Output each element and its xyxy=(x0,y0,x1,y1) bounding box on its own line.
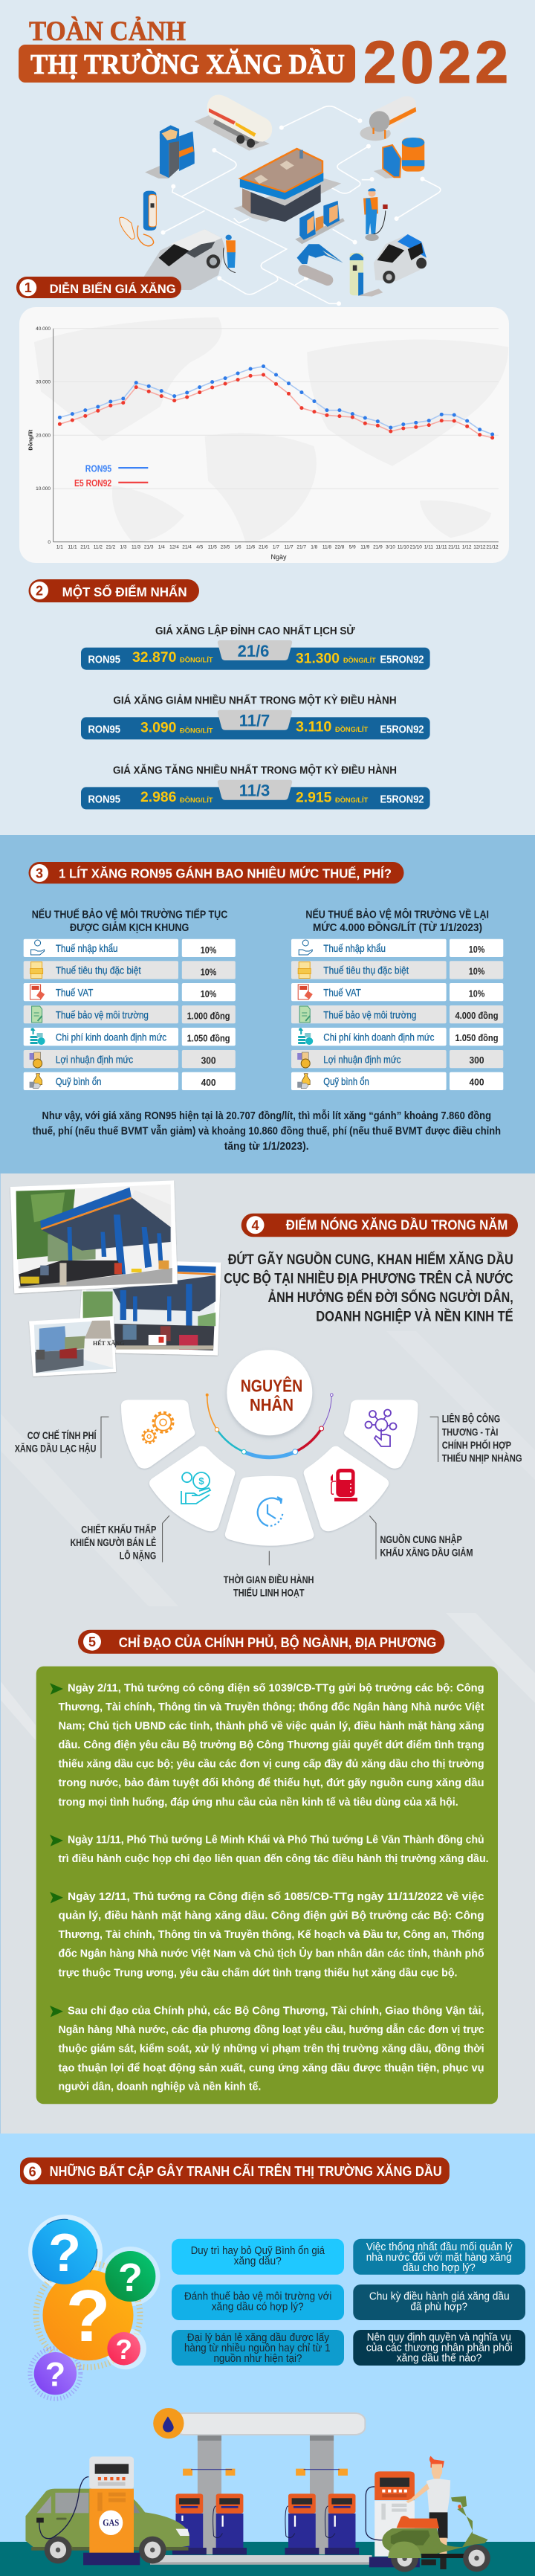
x axis labels: 21/12 xyxy=(486,544,499,550)
coloured arc xyxy=(206,1394,333,1458)
row: VAT xyxy=(291,983,503,1001)
question card 5 xyxy=(172,2330,344,2366)
directive follow-up: người dân, doanh nghiệp và nền kinh tế. xyxy=(58,2081,261,2093)
attendant refuelling car xyxy=(224,235,236,273)
x axis labels: 5/9 xyxy=(349,544,356,550)
row: special consumption tax: 10% xyxy=(201,967,217,977)
row: profit: 300 xyxy=(470,1054,484,1066)
x axis labels: 11/9 xyxy=(360,544,370,550)
right dispenser xyxy=(366,2471,420,2567)
row: environment tax: 4.000 đồng xyxy=(455,1010,499,1021)
row: business cost: 1.050 đồng xyxy=(455,1032,499,1043)
label: inflexible management time: THỜI GIAN ĐIỀU HÀNH xyxy=(224,1573,314,1585)
row: stabilization fund xyxy=(291,1072,503,1090)
section 5 header: CHỈ ĐẠO CỦA CHÍNH PHỦ, BỘ NGÀNH, ĐỊA PHƯƠNG xyxy=(119,1635,436,1650)
question card 5: Đại lý bán lẻ xăng dầu được lấy xyxy=(187,2332,330,2344)
chart legend xyxy=(74,463,148,489)
x axis labels: 23/5 xyxy=(221,544,230,550)
row: special consumption tax: Thuế tiêu thụ đặc biệt xyxy=(323,965,409,976)
text block: hot spots statement xyxy=(224,1252,513,1325)
illustration: petrol station scene xyxy=(25,2408,490,2572)
panel: tax table if environment tax stays reduced xyxy=(24,907,236,1090)
directive 12/11: Ngày 12/11, Thủ tướng ra Công điện số 1085/CĐ-TTg ngày 11/11/2022 về việc xyxy=(68,1890,484,1903)
row: special consumption tax xyxy=(291,961,503,979)
highlight: biggest single increase: RON95 xyxy=(88,793,120,805)
highlight: biggest single increase: 11/3 xyxy=(239,782,270,800)
label: inflexible management time: THIẾU LINH HOẠT xyxy=(233,1587,305,1599)
orange bubble: ? xyxy=(66,2275,110,2357)
highlight: biggest single decrease xyxy=(81,694,430,739)
highlight: record high price: RON95 xyxy=(88,654,120,666)
x axis labels: 21/1 xyxy=(80,544,90,550)
line series RON95 and E5 RON92 xyxy=(59,367,493,438)
question card 2: nhà nước đối với mặt hàng xăng xyxy=(366,2252,512,2264)
station building xyxy=(234,149,341,222)
GAS label: GAS xyxy=(103,2517,119,2528)
question card 3 xyxy=(172,2284,344,2320)
row: VAT xyxy=(24,983,236,1001)
x axis labels xyxy=(56,544,499,561)
question card 1: Duy trì hay bỏ Quỹ Bình ổn giá xyxy=(191,2245,325,2257)
canopy columns xyxy=(198,2435,334,2554)
question card 1: xăng dầu? xyxy=(234,2255,282,2267)
directive 2/11: Nam; Chủ tịch UBND các tỉnh, thành phố về việc quản lý, điều hành mặt hàng xăng xyxy=(58,1719,484,1732)
y axis labels: Đồng/lít xyxy=(27,429,34,451)
x axis labels: Ngày xyxy=(270,553,287,561)
question card 3: Đánh thuế bảo vệ môi trường với xyxy=(184,2290,331,2302)
ground xyxy=(0,2542,535,2576)
row: profit: Lợi nhuận định mức xyxy=(323,1053,401,1065)
icon: network and pointing hand xyxy=(366,1410,397,1446)
directive 2/11: dầu. Công điện yêu cầu Bộ trưởng Bộ Công Thương giải quyết dứt điểm tình trạng xyxy=(58,1739,484,1751)
question card 4: đã phù hợp? xyxy=(410,2301,467,2313)
number badge 6 xyxy=(24,2163,42,2180)
directive 12/11: quản lý, điều hành mặt hàng xăng dầu. Công điện gửi Bộ trưởng các Bộ: Công xyxy=(58,1910,484,1922)
pink bubble xyxy=(107,2332,140,2366)
row: business cost: Chi phí kinh doanh định mức xyxy=(323,1031,434,1043)
highlight: record high price: ĐỒNG/LÍT xyxy=(180,656,213,665)
row: special consumption tax xyxy=(24,961,236,979)
row: stabilization fund: Quỹ bình ổn xyxy=(56,1075,101,1087)
x axis labels: 12/4 xyxy=(169,544,179,550)
question card 6: của các thương nhân phân phối xyxy=(366,2342,513,2354)
photo: Petrolimex station crowd xyxy=(10,1180,178,1293)
directive 11/11 xyxy=(50,1833,489,1865)
x axis labels: 11/8 xyxy=(322,544,331,550)
row: import tax xyxy=(291,939,503,957)
directive 2/11: Thương, Tài chính, Thông tin và Truyền thông; thống đốc Ngân hàng Nhà nước Việt xyxy=(58,1701,484,1713)
table heading left: ĐƯỢC GIẢM KỊCH KHUNG xyxy=(70,921,189,934)
row: profit xyxy=(291,1050,503,1068)
label: inflexible management time xyxy=(224,1551,314,1599)
table heading right: NẾU THUẾ BẢO VỆ MÔI TRƯỜNG VỀ LẠI xyxy=(305,907,489,921)
section 2 header: MỘT SỐ ĐIỂM NHẤN xyxy=(62,584,187,599)
central circle: nguyên nhân xyxy=(227,1350,312,1435)
highlight: record high price xyxy=(81,624,430,670)
directive 2/11: thiếu xăng dầu cục bộ; yêu cầu các đơn vị cung cấp đầy đủ xăng dầu cho thị trường xyxy=(58,1758,484,1771)
label: outdated pricing mechanism: CƠ CHẾ TÍNH PHÍ xyxy=(27,1429,97,1441)
fuel dispenser left xyxy=(145,125,195,178)
highlight: biggest single decrease: RON95 xyxy=(88,724,120,735)
directive follow-up: Sau chỉ đạo của Chính phủ, các Bộ Công Thương, Tài chính, Giao thông Vận tải, xyxy=(68,2004,484,2017)
row: import tax xyxy=(24,939,236,957)
row: stabilization fund: 400 xyxy=(470,1077,484,1087)
number badge 2: 2 xyxy=(36,583,43,598)
x axis labels: 1/3 xyxy=(120,544,127,550)
x axis labels: 3/10 xyxy=(386,544,395,550)
label: ministries lack coordination xyxy=(430,1412,522,1464)
label: low discount: LỖ NẶNG xyxy=(120,1549,156,1562)
highlight: record high price: ĐỒNG/LÍT xyxy=(343,656,376,665)
heading: Toàn cảnh: TOÀN CẢNH xyxy=(29,16,186,47)
x axis labels: 11/2 xyxy=(94,544,103,550)
row: VAT: Thuế VAT xyxy=(323,986,361,998)
directive follow-up: thuộc giám sát, kiểm soát, xử lý những vi phạm trên thị trường xăng dầu, đồng thời xyxy=(58,2043,484,2055)
central circle: nguyên nhân: NGUYÊN xyxy=(241,1376,302,1396)
attendant with nozzle xyxy=(363,188,388,241)
highlight: biggest single decrease: ĐỒNG/LÍT xyxy=(335,725,368,734)
directive 2/11 xyxy=(50,1681,484,1809)
diagram: causes xyxy=(15,1350,522,1599)
row: import tax: 10% xyxy=(201,944,217,956)
x axis labels: 12/12 xyxy=(473,544,486,550)
chart legend: RON95 xyxy=(85,463,111,474)
table heading left xyxy=(32,907,227,934)
x axis labels: 1/7 xyxy=(273,544,279,550)
directive follow-up xyxy=(50,2004,484,2093)
x axis labels: 22/8 xyxy=(335,544,345,550)
question card 6 xyxy=(353,2330,525,2366)
label: ministries lack coordination: LIÊN BỘ CÔNG xyxy=(442,1412,500,1425)
label: import supply decline xyxy=(369,1516,473,1559)
row: import tax: Thuế nhập khẩu xyxy=(323,942,386,954)
directive follow-up: Ngân hàng Nhà nước, các địa phương đồng loạt yêu cầu, hướng dẫn các đơn vị trực xyxy=(58,2023,484,2036)
highlight: record high price: GIÁ XĂNG LẬP ĐỈNH CAO NHẤT LỊCH SỬ xyxy=(155,624,355,637)
y axis labels: 10.000 xyxy=(36,486,51,492)
panel: tax table if environment tax returns to 4000 xyxy=(291,907,503,1090)
highlight: biggest single increase: GIÁ XĂNG TĂNG NHIỀU NHẤT TRONG MỘT KỲ ĐIỀU HÀNH xyxy=(113,764,397,777)
purple bubble xyxy=(34,2352,77,2395)
row: import tax: Thuế nhập khẩu xyxy=(56,942,117,954)
label: ministries lack coordination: CHÍNH PHỐI HỢP xyxy=(442,1438,511,1451)
x axis labels: 11/11 xyxy=(435,544,447,550)
x axis labels: 21/3 xyxy=(144,544,154,550)
label: outdated pricing mechanism: XĂNG DẦU LẠC HẬU xyxy=(15,1442,97,1455)
section 6 header xyxy=(20,2157,450,2184)
highlight: biggest single increase: 2.986 xyxy=(140,790,176,805)
question card 6: Nên quy định quyền và nghĩa vụ xyxy=(367,2332,511,2344)
row: VAT: Thuế VAT xyxy=(56,986,94,998)
highlight: biggest single decrease: GIÁ XĂNG GIẢM NHIỀU NHẤT TRONG MỘT KỲ ĐIỀU HÀNH xyxy=(113,694,397,707)
directive 12/11: đốc Ngân hàng Nhà nước Việt Nam và Chủ tịch Ủy ban nhân dân các tỉnh, thành phố xyxy=(58,1947,484,1960)
icon: dollar sign: $ xyxy=(198,1475,204,1487)
number badge 4: 4 xyxy=(251,1218,259,1233)
row: stabilization fund xyxy=(24,1072,236,1090)
section 1 header: DIỄN BIẾN GIÁ XĂNG xyxy=(50,282,176,296)
number badge 5 xyxy=(83,1633,101,1651)
text block: tax summary xyxy=(33,1110,501,1153)
y axis labels: 30.000 xyxy=(36,379,51,385)
icon: gears xyxy=(143,1412,173,1443)
x axis labels: 11/5 xyxy=(208,544,217,550)
highlight: biggest single increase: ĐỒNG/LÍT xyxy=(180,796,213,805)
directive 12/11: trực thuộc Trung ương, yêu cầu chấm dứt tình trạng thiếu hụt xăng dầu cục bộ. xyxy=(58,1966,457,1979)
barrel and jerry can xyxy=(374,138,424,178)
y axis labels: 0 xyxy=(48,540,51,545)
question card 2 xyxy=(353,2239,525,2275)
section 6 header: NHỮNG BẤT CẬP GÂY TRANH CÃI TRÊN THỊ TRƯỜNG XĂNG DẦU xyxy=(50,2163,442,2179)
highlight: biggest single decrease: E5RON92 xyxy=(380,724,424,735)
text block: tax summary: tăng từ 1/1/2023). xyxy=(224,1140,309,1153)
EV charger right xyxy=(350,253,383,297)
table heading left: NẾU THUẾ BẢO VỆ MÔI TRƯỜNG TIẾP TỤC xyxy=(32,907,227,921)
row: business cost xyxy=(291,1028,503,1046)
icon: coins and hand xyxy=(181,1472,210,1504)
icon group: question bubbles xyxy=(28,2215,160,2399)
x axis labels: 21/7 xyxy=(296,544,306,550)
green bubble: ? xyxy=(118,2255,143,2300)
chart legend: E5 RON92 xyxy=(74,477,111,489)
highlight: biggest single increase: 2.915 xyxy=(296,790,332,806)
directive 12/11 xyxy=(50,1890,484,1979)
row: environment tax: Thuế bảo vệ môi trường xyxy=(323,1008,416,1020)
row: special consumption tax: Thuế tiêu thụ đặc biệt xyxy=(56,965,141,976)
label: low discount: KHIẾN NGƯỜI BÁN LẺ xyxy=(71,1536,156,1548)
question card 1 xyxy=(172,2239,344,2275)
orange bubble xyxy=(43,2270,134,2360)
y axis labels: 20.000 xyxy=(36,433,51,439)
table heading right: MỨC 4.000 ĐỒNG/LÍT (TỪ 1/1/2023) xyxy=(313,921,482,934)
directive 2/11: trong nước, bảo đảm tuyệt đối không để thiếu hụt, đứt gãy nguồn cung xăng dầu xyxy=(58,1777,484,1789)
green bubble xyxy=(105,2251,155,2302)
directive follow-up: tạo thuận lợi để hoạt động sản xuất, cung ứng xăng dầu được thuận tiện, phục vụ xyxy=(58,2061,484,2074)
number badge 1: 1 xyxy=(25,280,32,295)
directive 11/11: Ngày 11/11, Phó Thủ tướng Lê Minh Khái và Phó Thủ tướng Lê Văn Thành đồng chủ xyxy=(68,1833,484,1846)
question card 3: xăng dầu có hợp lý? xyxy=(212,2301,304,2313)
green car xyxy=(25,2477,189,2563)
label: import supply decline: KHẨU XĂNG DẦU GIẢM xyxy=(380,1546,473,1559)
row: profit: 300 xyxy=(201,1054,216,1066)
y axis labels: 40.000 xyxy=(36,326,51,332)
label: import supply decline: NGUỒN CUNG NHẬP xyxy=(380,1533,462,1545)
big GAS pump xyxy=(83,2456,140,2565)
illustration: isometric petrol station xyxy=(120,94,441,303)
x axis labels: 21/9 xyxy=(373,544,383,550)
icon: clock xyxy=(258,1497,282,1526)
section 2 header xyxy=(28,579,199,602)
man with scooter xyxy=(382,2456,490,2572)
photo: out of petrol sign xyxy=(29,1316,124,1376)
x axis labels: 1/4 xyxy=(158,544,165,550)
highlight: biggest single decrease: 3.110 xyxy=(296,720,331,735)
x axis labels: 1/1 xyxy=(56,544,63,550)
number badge 1 xyxy=(19,279,36,296)
section 4 header: ĐIỂM NÓNG XĂNG DẦU TRONG NĂM xyxy=(286,1217,508,1232)
row: VAT: 10% xyxy=(469,988,485,999)
row: profit xyxy=(24,1050,236,1068)
highlight: biggest single increase: ĐỒNG/LÍT xyxy=(335,796,368,805)
label: low discount: CHIẾT KHẤU THẤP xyxy=(81,1523,156,1535)
row: environment tax xyxy=(291,1005,503,1023)
x axis labels: 1/8 xyxy=(311,544,318,550)
number badge 6: 6 xyxy=(29,2164,36,2179)
row: business cost: 1.050 đồng xyxy=(187,1032,230,1044)
photo: out of petrol sign: HẾT XĂNG xyxy=(93,1339,124,1347)
x axis labels: 21/10 xyxy=(410,544,422,550)
pink bubble: ? xyxy=(115,2334,132,2365)
highlight: biggest single decrease: ĐỒNG/LÍT xyxy=(180,727,213,735)
question card 6: xăng dầu thế nào? xyxy=(397,2353,482,2365)
icon: red fuel pump xyxy=(331,1469,357,1501)
central circle: nguyên nhân: NHÂN xyxy=(250,1394,294,1414)
panel: petrol price line chart xyxy=(19,307,509,563)
x axis labels: 1/12 xyxy=(462,544,472,550)
number badge 4 xyxy=(247,1216,265,1234)
section 5 header xyxy=(78,1630,444,1654)
tanker truck xyxy=(195,94,272,151)
heading: year 2022: 2022 xyxy=(363,29,508,95)
number badge 3: 3 xyxy=(36,866,43,880)
x axis labels: 11/10 xyxy=(398,544,409,550)
forecourt slab xyxy=(150,2555,372,2565)
question card 5: nguồn như hiện tại? xyxy=(214,2353,302,2365)
directive 2/11: trong mọi tình huống, đáp ứng nhu cầu của nền kinh tế và tiêu dùng của xã hội. xyxy=(58,1796,458,1809)
row: stabilization fund: 400 xyxy=(201,1077,216,1088)
section 1 header xyxy=(16,277,181,298)
number badge 5: 5 xyxy=(88,1635,96,1649)
number badge 2 xyxy=(30,582,48,599)
row: special consumption tax: 10% xyxy=(469,966,485,977)
directive 2/11: Ngày 2/11, Thủ tướng có công điện số 1039/CĐ-TTg gửi bộ trưởng các bộ: Công xyxy=(68,1681,484,1694)
blue bubble xyxy=(32,2219,97,2284)
header title xyxy=(19,16,508,95)
highlight: record high price: 32.870 xyxy=(132,650,176,666)
section 3 header xyxy=(28,862,404,883)
section 4 header xyxy=(241,1214,518,1237)
highlight: record high price: E5RON92 xyxy=(380,654,424,666)
white petals xyxy=(121,1400,418,1546)
pump island xyxy=(295,201,345,244)
label: ministries lack coordination: THƯƠNG - TÀI xyxy=(442,1426,498,1437)
question card 2: dầu cho hợp lý? xyxy=(403,2262,476,2274)
small electric car xyxy=(374,234,427,283)
row: stabilization fund: Quỹ bình ổn xyxy=(323,1075,369,1087)
row: environment tax: Thuế bảo vệ môi trường xyxy=(56,1008,149,1020)
y axis labels xyxy=(27,326,51,545)
EV charger left xyxy=(120,191,156,246)
storage tank xyxy=(360,96,416,141)
label: outdated pricing mechanism xyxy=(15,1417,109,1458)
x axis labels: 11/3 xyxy=(132,544,141,550)
title banner: THỊ TRƯỜNG XĂNG DẦU xyxy=(30,48,345,80)
row: environment tax: 1.000 đồng xyxy=(187,1010,230,1022)
panel: government directions xyxy=(36,1667,498,2104)
photo: queue at station, overpass xyxy=(78,1259,221,1356)
purple bubble: ? xyxy=(45,2356,65,2393)
directive 11/11: trì điều hành cuộc họp chỉ đạo liên quan đến công tác điều hành thị trường xăng dầu. xyxy=(58,1852,489,1865)
highlight: record high price: 31.300 xyxy=(296,651,340,667)
silver car refuelling xyxy=(143,229,225,290)
row: environment tax xyxy=(24,1005,236,1023)
canopy sign xyxy=(153,2408,365,2438)
chart grid and axes xyxy=(54,329,499,542)
row: VAT: 10% xyxy=(201,988,217,999)
table heading right xyxy=(305,907,489,934)
blue bubble: ? xyxy=(48,2224,81,2283)
x axis labels: 21/11 xyxy=(448,544,460,550)
section 3 header: 1 LÍT XĂNG RON95 GÁNH BAO NHIÊU MỨC THUẾ, PHÍ? xyxy=(59,866,392,881)
row: import tax: 10% xyxy=(469,944,485,955)
row: profit: Lợi nhuận định mức xyxy=(56,1053,133,1065)
question card 2: Việc thống nhất đầu mối quản lý xyxy=(366,2241,513,2253)
hanging lamps xyxy=(183,2469,348,2476)
highlight: biggest single decrease: 3.090 xyxy=(140,721,176,736)
small dispensers xyxy=(172,2493,359,2554)
question card 4 xyxy=(353,2284,525,2320)
x axis labels: 21/2 xyxy=(106,544,116,550)
x axis labels: 11/6 xyxy=(246,544,256,550)
x axis labels: 1/6 xyxy=(235,544,241,550)
question card 5: hàng từ nhiều nguồn hay chỉ từ 1 xyxy=(184,2342,330,2354)
question card 4: Chu kỳ điều hành giá xăng dầu xyxy=(369,2290,510,2302)
row: business cost: Chi phí kinh doanh định mức xyxy=(56,1031,166,1043)
x axis labels: 21/6 xyxy=(259,544,268,550)
highlight: biggest single increase xyxy=(81,764,430,809)
label: low discount xyxy=(71,1516,169,1562)
directive 12/11: Thương, Tài chính, Thông tin và Truyền thông, Kế hoạch và Đầu tư, Công an, Thống xyxy=(58,1928,484,1941)
x axis labels: 11/7 xyxy=(285,544,294,550)
row: business cost xyxy=(24,1028,236,1046)
x axis labels: 4/5 xyxy=(196,544,204,550)
x axis labels: 1/11 xyxy=(424,544,433,550)
x axis labels: 11/1 xyxy=(68,544,77,550)
x axis labels: 21/4 xyxy=(182,544,192,550)
number badge 3 xyxy=(30,864,48,882)
highlight: record high price: 21/6 xyxy=(238,642,269,660)
highlight: biggest single decrease: 11/7 xyxy=(239,712,270,730)
fuel nozzle xyxy=(297,244,343,280)
highlight: biggest single increase: E5RON92 xyxy=(380,793,424,805)
